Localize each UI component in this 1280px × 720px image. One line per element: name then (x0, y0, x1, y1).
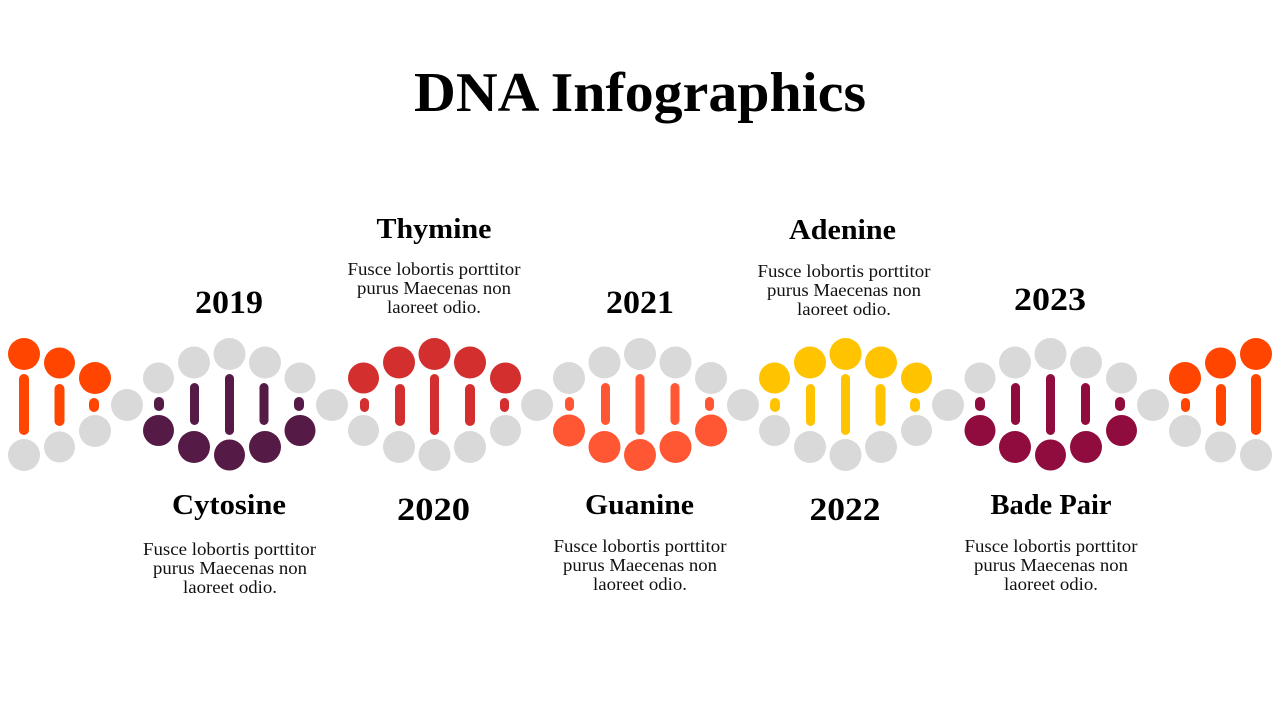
text block: Thymine description: Fusce lobortis porttitor (348, 259, 521, 279)
text block: Cytosine description: laoreet odio. (183, 577, 277, 597)
heading: Cytosine: Cytosine (172, 490, 286, 521)
icon: purple DNA segment (143, 338, 316, 470)
icon: gray connector node 5 (932, 389, 964, 421)
text block: Bade Pair description: laoreet odio. (1004, 574, 1098, 594)
text block: Guanine description (554, 536, 727, 594)
icon: crimson DNA segment (964, 338, 1137, 470)
text block: Guanine description: Fusce lobortis porttitor (554, 536, 727, 556)
year 2020: 2020 (397, 492, 470, 528)
year 2021: 2021 (606, 285, 674, 321)
heading: Guanine: Guanine (585, 490, 694, 521)
text block: Adenine description: Fusce lobortis porttitor (758, 261, 931, 281)
text block: Adenine description (758, 261, 931, 319)
heading: Adenine: Adenine (789, 215, 896, 246)
text block: Thymine description: purus Maecenas non (357, 278, 511, 298)
text block: Guanine description: laoreet odio. (593, 574, 687, 594)
text block: Bade Pair description (964, 536, 1138, 594)
text block: Guanine description: purus Maecenas non (563, 555, 717, 575)
text block: Thymine description (348, 259, 521, 317)
icon: gray connector node 2 (316, 389, 348, 421)
text block: Cytosine description (143, 539, 316, 597)
text block: Thymine description: laoreet odio. (387, 297, 481, 317)
icon: yellow DNA segment (759, 338, 932, 471)
icon: gray connector node 1 (111, 389, 143, 421)
icon: gray connector node 3 (521, 389, 553, 421)
icon: coral DNA segment (553, 338, 727, 471)
text block: Adenine description: purus Maecenas non (767, 280, 921, 300)
text block: Cytosine description: purus Maecenas non (153, 558, 307, 578)
title: DNA Infographics (414, 62, 866, 124)
text block: Bade Pair description: Fusce lobortis porttitor (964, 536, 1138, 556)
year 2023: 2023 (1014, 282, 1086, 318)
icon: left partial DNA strand (8, 338, 111, 471)
icon: gray connector node 6 (1137, 389, 1169, 421)
year 2019: 2019 (195, 285, 263, 321)
icon: right partial DNA strand (1169, 338, 1272, 471)
icon: red DNA segment (348, 338, 521, 471)
text block: Bade Pair description: purus Maecenas non (974, 555, 1128, 575)
heading: Thymine: Thymine (376, 214, 492, 245)
year 2022: 2022 (810, 492, 880, 528)
text block: Adenine description: laoreet odio. (797, 299, 891, 319)
icon: gray connector node 4 (727, 389, 759, 421)
heading: Bade Pair: Bade Pair (990, 490, 1112, 521)
text block: Cytosine description: Fusce lobortis porttitor (143, 539, 316, 559)
